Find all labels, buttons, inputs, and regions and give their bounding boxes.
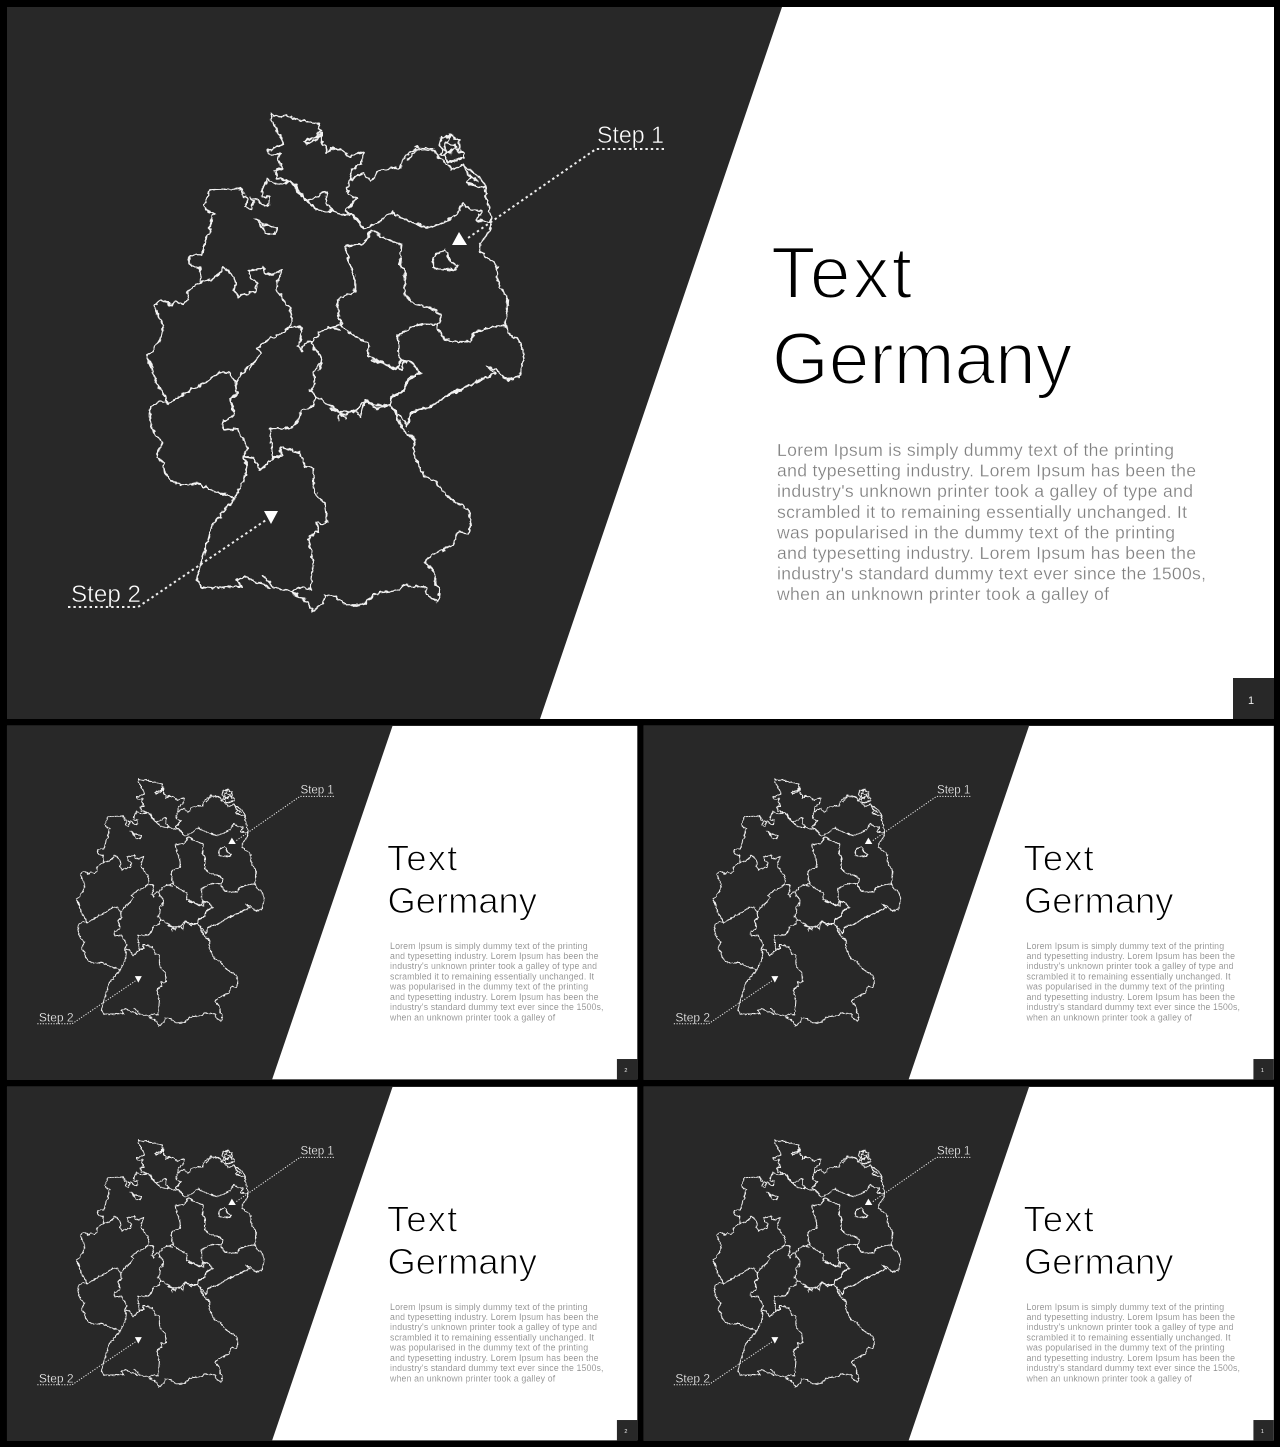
body text: when an unknown printer took a galley of bbox=[389, 1012, 556, 1022]
body text: when an unknown printer took a galley of bbox=[776, 584, 1109, 604]
body text: Lorem Ipsum is simply dummy text of the printing bbox=[390, 1302, 588, 1312]
body text bbox=[776, 440, 1206, 604]
map of Germany bbox=[76, 779, 264, 1026]
body text: industry's standard dummy text ever since the 1500s, bbox=[390, 1002, 603, 1012]
callout: step 2 bbox=[674, 1337, 778, 1385]
heading: Germany bbox=[1024, 880, 1174, 921]
body text: and typesetting industry. Lorem Ipsum has been the bbox=[1027, 1312, 1235, 1322]
body text: was popularised in the dummy text of the printing bbox=[1026, 1343, 1225, 1353]
callout: step 2 bbox=[68, 511, 278, 608]
callout: step 2: Step 2 bbox=[675, 1010, 711, 1024]
page number badge bbox=[1253, 1420, 1274, 1440]
body text: industry's unknown printer took a galley of type and bbox=[777, 481, 1193, 501]
body text: industry's standard dummy text ever since the 1500s, bbox=[1027, 1363, 1240, 1373]
heading: Text bbox=[387, 1198, 457, 1239]
slide 1: main panel bbox=[7, 7, 1274, 719]
body text: and typesetting industry. Lorem Ipsum has been the bbox=[390, 1312, 599, 1322]
body text: scrambled it to remaining essentially unchanged. It bbox=[1027, 971, 1231, 981]
body text bbox=[1026, 1302, 1240, 1383]
page number badge bbox=[617, 1059, 637, 1079]
body text: scrambled it to remaining essentially unchanged. It bbox=[1027, 1332, 1231, 1342]
body text: industry's unknown printer took a galley of type and bbox=[1027, 1322, 1234, 1332]
body text: and typesetting industry. Lorem Ipsum has been the bbox=[777, 543, 1196, 563]
body text: when an unknown printer took a galley of bbox=[1026, 1012, 1192, 1022]
body text: industry's standard dummy text ever since the 1500s, bbox=[777, 564, 1206, 584]
body text: was popularised in the dummy text of the printing bbox=[776, 522, 1175, 542]
dark diagonal panel bbox=[7, 7, 782, 719]
body text: industry's standard dummy text ever since the 1500s, bbox=[1027, 1002, 1240, 1012]
page number badge: 1 bbox=[1261, 1429, 1264, 1435]
map of Germany bbox=[76, 1140, 264, 1387]
page number badge bbox=[1253, 1059, 1274, 1079]
heading: Germany bbox=[1024, 1241, 1174, 1282]
body text: and typesetting industry. Lorem Ipsum has been the bbox=[1027, 1353, 1235, 1363]
body text: Lorem Ipsum is simply dummy text of the printing bbox=[390, 941, 588, 951]
callout: step 1: Step 1 bbox=[937, 1143, 971, 1157]
white panel background bbox=[7, 7, 1274, 719]
body text: industry's unknown printer took a galley of type and bbox=[390, 961, 597, 971]
body text: when an unknown printer took a galley of bbox=[1026, 1373, 1192, 1383]
callout: step 1: Step 1 bbox=[597, 122, 664, 149]
map of Germany bbox=[146, 114, 524, 612]
body text bbox=[1026, 941, 1240, 1022]
body text: when an unknown printer took a galley of bbox=[389, 1373, 556, 1383]
heading: Germany bbox=[388, 1241, 538, 1282]
page number badge: 2 bbox=[624, 1068, 627, 1074]
callout: step 2 bbox=[37, 1337, 142, 1385]
heading: Text bbox=[1024, 1198, 1094, 1239]
body text: and typesetting industry. Lorem Ipsum has been the bbox=[390, 1353, 599, 1363]
callout: step 1 bbox=[865, 1143, 971, 1205]
slide 5: thumbnail bottom right bbox=[643, 1087, 1274, 1440]
body text: was popularised in the dummy text of the printing bbox=[1026, 982, 1225, 992]
callout: step 1: Step 1 bbox=[301, 1143, 334, 1157]
body text bbox=[389, 941, 603, 1022]
callout: step 1 bbox=[865, 782, 971, 844]
body text: industry's standard dummy text ever since the 1500s, bbox=[390, 1363, 603, 1373]
body text: Lorem Ipsum is simply dummy text of the printing bbox=[1027, 941, 1224, 951]
body text: and typesetting industry. Lorem Ipsum has been the bbox=[1027, 951, 1235, 961]
body text: Lorem Ipsum is simply dummy text of the printing bbox=[777, 440, 1174, 460]
map of Germany bbox=[713, 779, 901, 1026]
callout: step 1 bbox=[228, 1143, 334, 1205]
heading: Text bbox=[387, 837, 457, 878]
callout: step 2: Step 2 bbox=[39, 1010, 74, 1024]
callout: step 1: Step 1 bbox=[937, 782, 971, 796]
page number badge: 1 bbox=[1261, 1068, 1264, 1074]
body text: scrambled it to remaining essentially unchanged. It bbox=[390, 971, 595, 981]
body text: industry's unknown printer took a galley of type and bbox=[390, 1322, 597, 1332]
slide 2: thumbnail top left bbox=[7, 726, 637, 1079]
page number badge bbox=[1233, 678, 1274, 719]
body text: and typesetting industry. Lorem Ipsum has been the bbox=[390, 951, 599, 961]
slide 4: thumbnail bottom left bbox=[7, 1087, 637, 1440]
map of Germany bbox=[713, 1140, 901, 1387]
body text: scrambled it to remaining essentially unchanged. It bbox=[777, 502, 1187, 522]
body text: industry's unknown printer took a galley of type and bbox=[1027, 961, 1234, 971]
heading: Germany bbox=[388, 880, 538, 921]
body text: and typesetting industry. Lorem Ipsum has been the bbox=[390, 992, 599, 1002]
page number badge: 1 bbox=[1248, 695, 1254, 707]
body text: scrambled it to remaining essentially unchanged. It bbox=[390, 1332, 595, 1342]
callout: step 2 bbox=[674, 976, 778, 1024]
callout: step 2: Step 2 bbox=[71, 581, 141, 608]
callout: step 2: Step 2 bbox=[675, 1371, 711, 1385]
page number badge bbox=[617, 1420, 637, 1440]
body text bbox=[389, 1302, 603, 1383]
callout: step 1 bbox=[228, 782, 334, 844]
body text: Lorem Ipsum is simply dummy text of the printing bbox=[1027, 1302, 1224, 1312]
callout: step 2 bbox=[37, 976, 142, 1024]
callout: step 1: Step 1 bbox=[301, 782, 334, 796]
callout: step 2: Step 2 bbox=[39, 1371, 74, 1385]
body text: was popularised in the dummy text of the printing bbox=[389, 982, 588, 992]
page number badge: 2 bbox=[624, 1429, 627, 1435]
body text: and typesetting industry. Lorem Ipsum has been the bbox=[1027, 992, 1235, 1002]
heading: Germany bbox=[772, 319, 1073, 400]
slide 3: thumbnail top right bbox=[643, 726, 1274, 1079]
body text: and typesetting industry. Lorem Ipsum has been the bbox=[777, 461, 1196, 481]
callout: step 1 bbox=[452, 122, 664, 245]
heading: Text bbox=[1024, 837, 1094, 878]
heading: Text bbox=[771, 233, 912, 314]
body text: was popularised in the dummy text of the printing bbox=[389, 1343, 588, 1353]
